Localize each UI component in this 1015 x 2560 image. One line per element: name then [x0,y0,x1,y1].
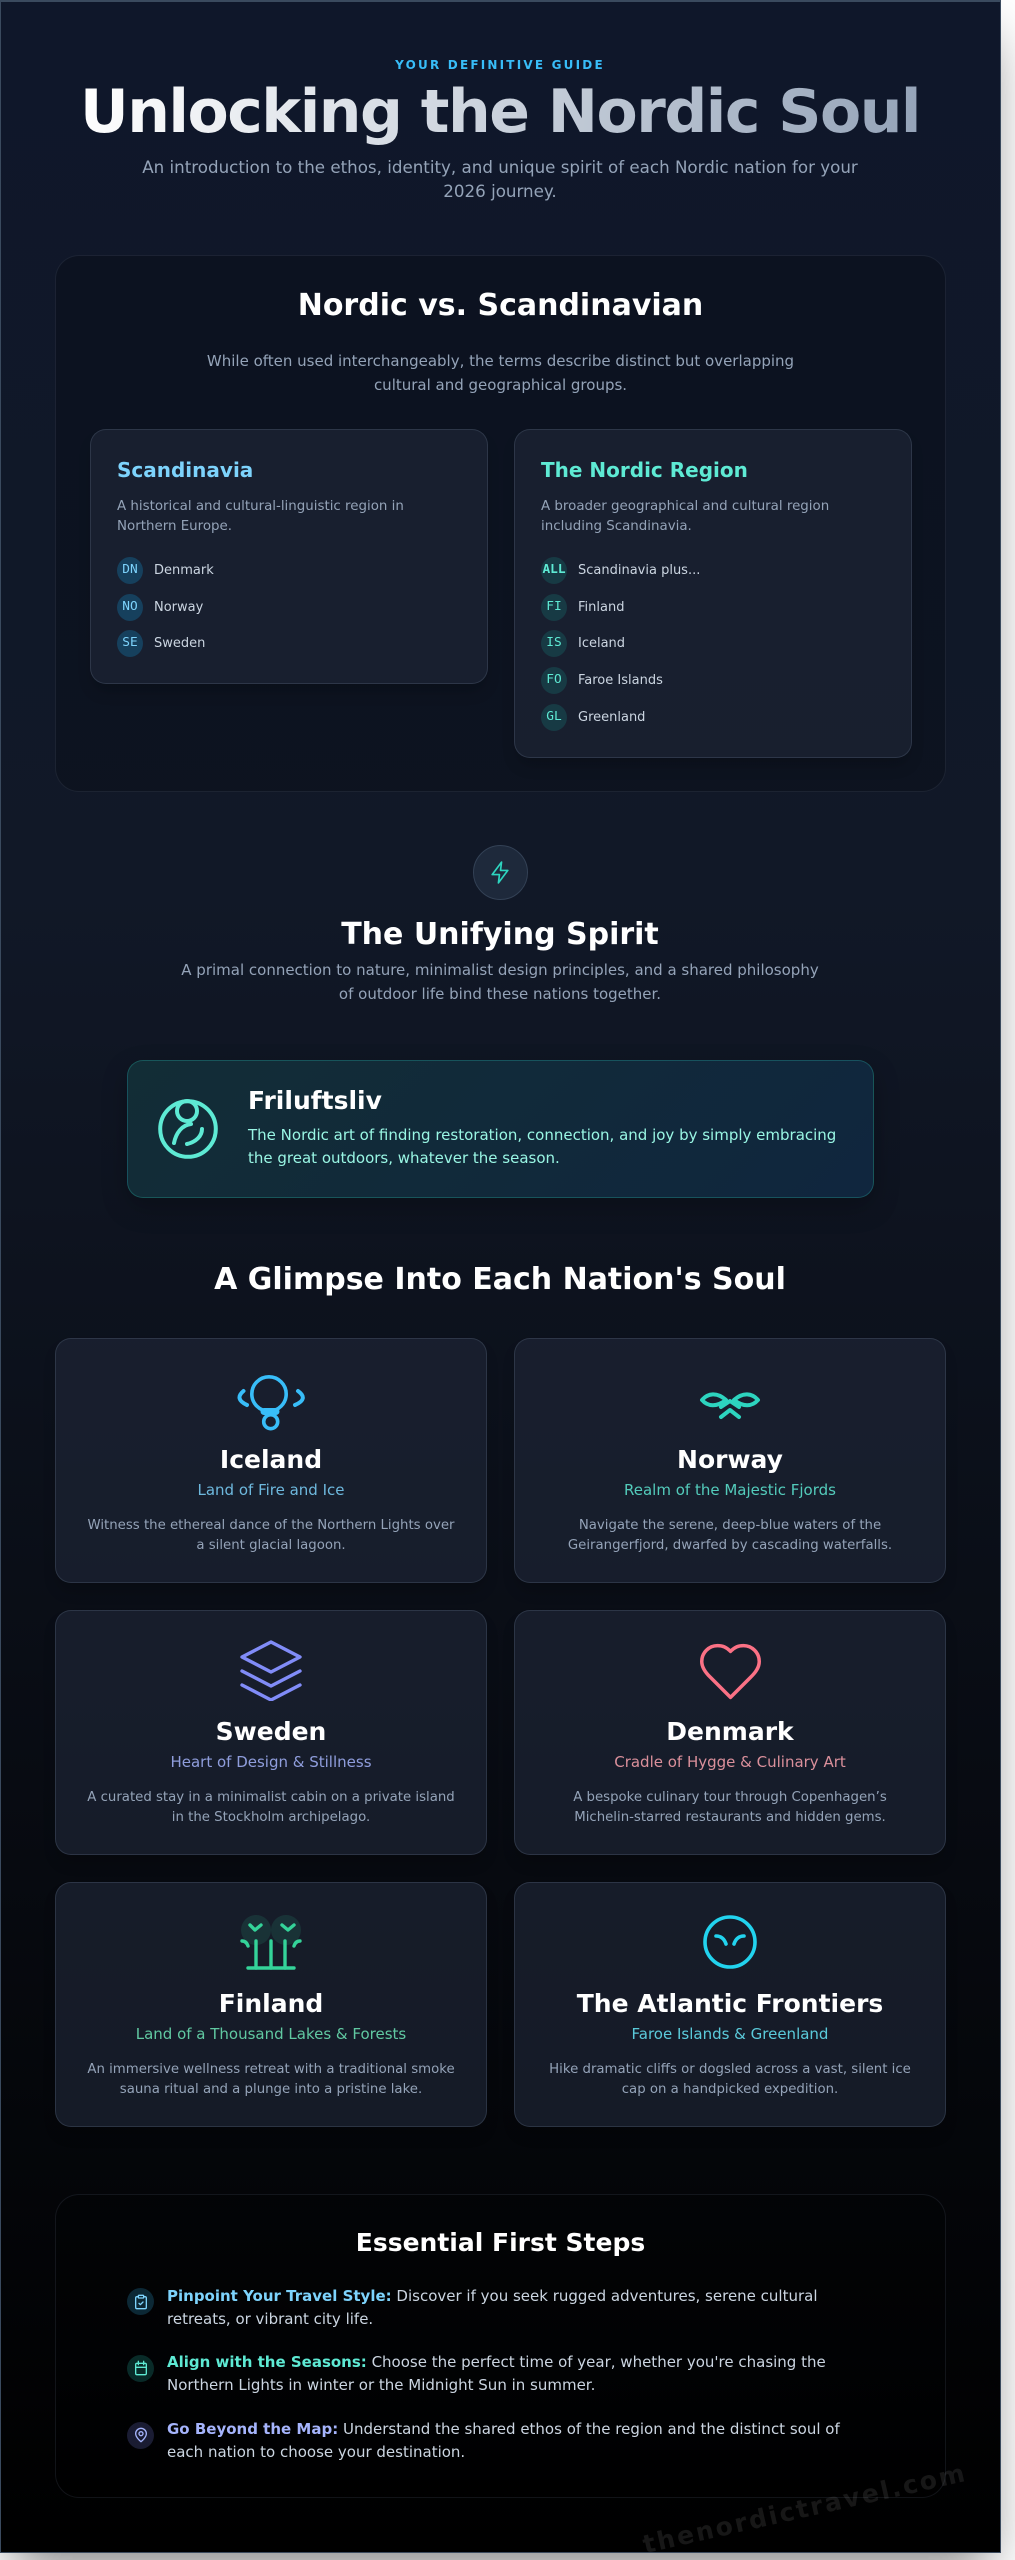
country tagline: Realm of the Majestic Fjords [624,1481,836,1499]
country description: Geirangerfjord, dwarfed by cascading waterfalls. [568,1538,892,1553]
icon: norway [700,1392,760,1420]
list item: iceland: IS [546,635,562,650]
icon: calendar [127,2354,154,2382]
card description [117,499,404,534]
country tagline: Cradle of Hygge & Culinary Art [614,1753,846,1771]
list item: sweden [117,630,205,657]
step 2 text: Northern Lights in winter or the Midnight Sun in summer. [167,2376,595,2394]
card: finland [55,1882,487,2127]
callout title: Friluftsliv [248,1086,382,1115]
list item: sweden: SE [122,635,138,650]
icon: finland [240,1915,302,1970]
country name: Iceland [220,1445,322,1474]
list item: all: Scandinavia plus... [578,563,700,578]
intro text: While often used interchangeably, the terms describe distinct but overlapping [207,352,794,370]
step 1 [127,2286,818,2328]
card: the atlantic frontiers [514,1882,946,2127]
icon: atlantic [703,1915,757,1969]
panel: nordic vs scandinavian [55,255,946,792]
card description: including Scandinavia. [541,519,692,534]
country description: cap on a handpicked expedition. [622,2082,838,2097]
icon: friluftsliv person in circle [158,1099,218,1159]
list item: finland: FI [546,599,562,614]
callout text [248,1126,836,1167]
list item: all [541,557,700,584]
list item: iceland: Iceland [578,636,625,651]
country name: Norway [677,1445,783,1474]
callout text: The Nordic art of finding restoration, connection, and joy by simply embracing [248,1126,836,1144]
country description [568,1518,892,1553]
step 1 text: retreats, or vibrant city life. [167,2310,373,2328]
card: norway [514,1338,946,1583]
card description: A broader geographical and cultural region [541,499,829,514]
icon: sweden [240,1640,302,1701]
spirit description [181,961,819,1002]
subtitle [142,157,858,201]
list item: norway: Norway [154,600,203,615]
country name: The Atlantic Frontiers [577,1989,883,2018]
step 3 text: Go Beyond the Map: Understand the shared ethos of the region and the distinct soul of [167,2420,840,2438]
step 2 [127,2353,826,2394]
step 1 text [167,2286,818,2328]
country description [549,2062,911,2097]
title: Unlocking the Nordic Soul [80,77,920,147]
card: denmark [514,1610,946,1855]
country description: Navigate the serene, deep-blue waters of the [579,1518,881,1533]
list item: sweden: Sweden [154,636,205,651]
list item: greenland: GL [546,709,562,724]
list item: denmark: DN [122,562,138,577]
list item: iceland [541,630,625,657]
card description: A historical and cultural-linguistic region in [117,499,404,514]
step 3 text: each nation to choose your destination. [167,2443,465,2461]
country name: Denmark [666,1717,794,1746]
list item: greenland: Greenland [578,710,645,725]
subtitle: An introduction to the ethos, identity, and unique spirit of each Nordic nation for your [142,157,858,177]
list item: norway: NO [122,599,138,614]
country description [573,1790,887,1825]
callout text: the great outdoors, whatever the season. [248,1149,560,1167]
country description [87,2062,455,2097]
list item: faroe islands: FO [546,672,562,687]
card: scandinavia [90,429,488,684]
country tagline: Faroe Islands & Greenland [632,2025,828,2043]
country description: in the Stockholm archipelago. [172,1810,370,1825]
spirit description: of outdoor life bind these nations together. [339,984,661,1002]
icon: clipboard check [127,2288,154,2315]
list item: faroe islands: Faroe Islands [578,673,663,688]
country tagline: Land of Fire and Ice [198,1481,344,1499]
heading: essential first steps: Essential First Steps [356,2228,645,2257]
card title: the nordic region: The Nordic Region [541,458,748,482]
country tagline: Heart of Design & Stillness [170,1753,372,1771]
intro text [207,352,794,394]
step 2 text [167,2353,826,2394]
list item: norway [117,594,203,621]
country description [87,1518,454,1553]
list item: finland [541,594,624,621]
eyebrow: your definitive guide: YOUR DEFINITIVE GUIDE [395,58,605,72]
list item: finland: Finland [578,600,624,615]
country description: Michelin-starred restaurants and hidden gems. [574,1810,886,1825]
card title: scandinavia: Scandinavia [117,458,253,482]
country name: Finland [219,1989,323,2018]
icon: denmark [700,1644,761,1700]
card: iceland [55,1338,487,1583]
country description [87,1790,455,1825]
icon: iceland [238,1375,305,1430]
list item: denmark [117,557,214,584]
list item: denmark: Denmark [154,563,214,578]
intro text: cultural and geographical groups. [374,376,627,394]
card: the nordic region [514,429,912,758]
card description: Northern Europe. [117,519,232,534]
icon: map pin [127,2422,154,2448]
country description: a silent glacial lagoon. [196,1538,346,1553]
country tagline: Land of a Thousand Lakes & Forests [136,2025,406,2043]
country description: A bespoke culinary tour through Copenhagen’s [573,1790,887,1805]
icon: lightning bolt [473,845,528,900]
card description [541,499,829,534]
spirit description: A primal connection to nature, minimalist design principles, and a shared philosophy [181,961,819,979]
list item: greenland [541,704,645,731]
step 1 text: Pinpoint Your Travel Style: Discover if you seek rugged adventures, serene cultural [167,2286,818,2304]
callout: friluftsliv [127,1060,874,1198]
country description: sauna ritual and a plunge into a pristine lake. [120,2082,422,2097]
panel: essential first steps [55,2194,946,2498]
step 2 text: Align with the Seasons: Choose the perfect time of year, whether you're chasing the [167,2353,826,2371]
heading: the unifying spirit: The Unifying Spirit [341,917,659,952]
country description: A curated stay in a minimalist cabin on a private island [87,1790,455,1805]
country description: Witness the ethereal dance of the Northern Lights over [87,1518,454,1533]
heading: a glimpse into each nation's soul: A Glimpse Into Each Nation's Soul [214,1262,786,1297]
list item: all: ALL [542,562,566,577]
step 3 [127,2420,840,2461]
list item: faroe islands [541,667,663,694]
country name: Sweden [216,1717,326,1746]
country description: An immersive wellness retreat with a traditional smoke [87,2062,455,2077]
country description: Hike dramatic cliffs or dogsled across a vast, silent ice [549,2062,911,2077]
card: sweden [55,1610,487,1855]
heading: nordic vs scandinavian: Nordic vs. Scandinavian [298,288,703,323]
step 3 text [167,2420,840,2461]
subtitle: 2026 journey. [443,181,557,201]
